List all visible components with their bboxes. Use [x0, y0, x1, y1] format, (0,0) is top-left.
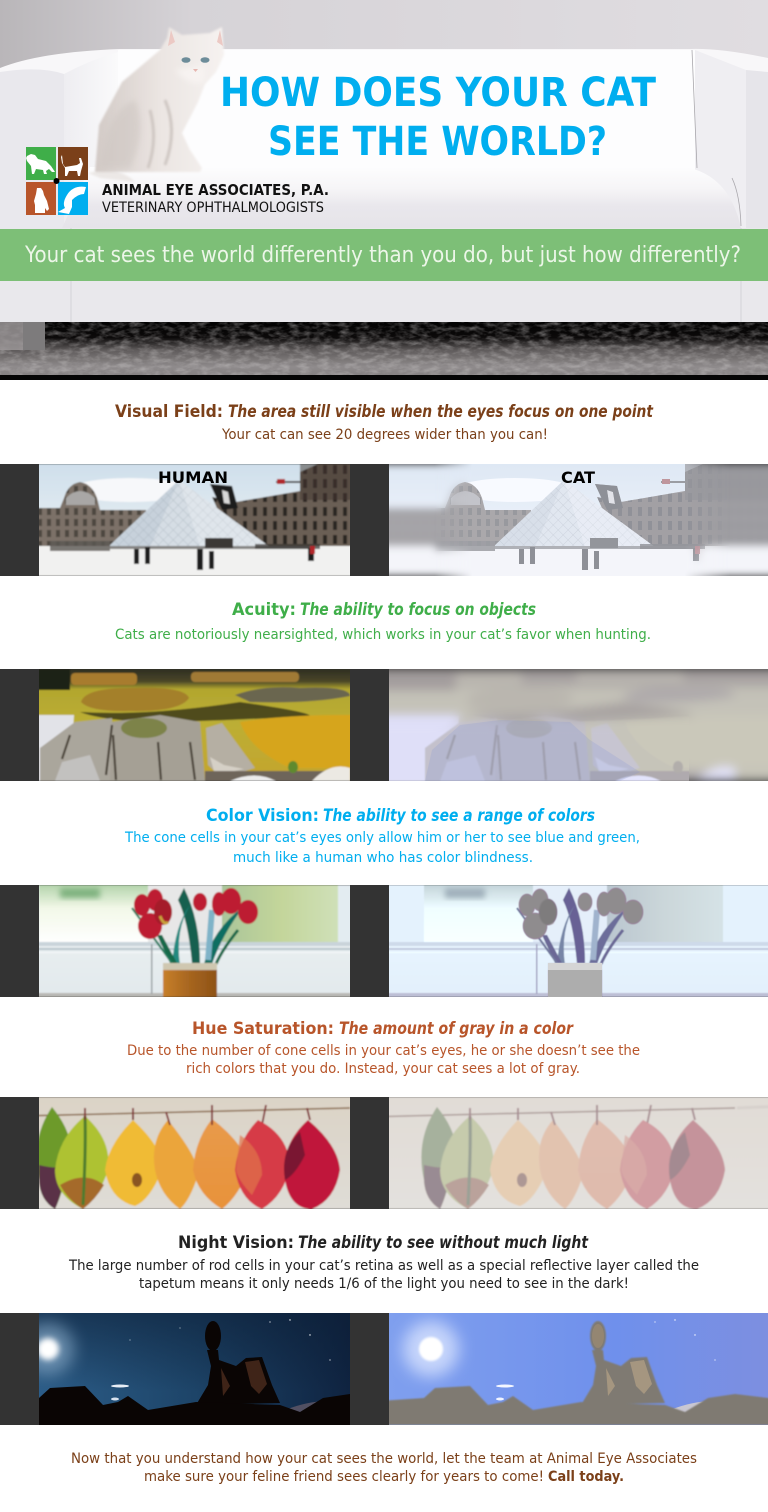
section: visual field heading [115, 402, 654, 443]
hero bottom rule [0, 375, 768, 380]
section: visual field heading: The area still visible when the eyes focus on one point [228, 402, 654, 422]
section: acuity heading: Cats are notoriously nearsighted, which works in your cat’s favor when hunting. [115, 627, 651, 643]
photo: cat view [365, 669, 768, 781]
section: hue saturation heading: Hue Saturation: [192, 1019, 334, 1039]
title [220, 70, 657, 165]
title: SEE THE WORLD? [268, 119, 607, 165]
section: night vision heading: Night Vision: [178, 1233, 294, 1253]
section: color vision heading: Color Vision: [206, 806, 319, 826]
icon: penguin [34, 188, 49, 213]
comparison: acuity photos [0, 669, 768, 781]
section: night vision heading: The ability to see without much light [298, 1233, 589, 1253]
photo: human view [39, 669, 350, 781]
closing call to action: Now that you understand how your cat sees the world, let the team at Animal Eye Associates [71, 1451, 697, 1467]
section: visual field heading: Visual Field: [115, 402, 223, 422]
closing call to action [71, 1451, 697, 1485]
section: night vision heading: tapetum means it only needs 1/6 of the light you need to see in the dark! [139, 1276, 629, 1292]
rug and shadow [0, 320, 768, 375]
section: night vision heading: The large number of rod cells in your cat’s retina as well as a special reflective layer called the [68, 1258, 699, 1274]
icon: dolphin [58, 187, 86, 214]
hero: cat on white sofa [0, 0, 768, 375]
section: acuity heading: Acuity: [232, 600, 296, 620]
section: visual field heading: Your cat can see 20 degrees wider than you can! [221, 427, 548, 443]
label: cat: CAT [561, 468, 595, 487]
label: human: HUMAN [158, 468, 228, 487]
photo: human view [39, 1313, 350, 1425]
section: color vision heading: The cone cells in your cat’s eyes only allow him or her to see blue and green, [124, 830, 640, 846]
company name: ANIMAL EYE ASSOCIATES, P.A. [102, 181, 329, 199]
section: color vision heading: much like a human who has color blindness. [233, 850, 533, 866]
icon: dog [26, 154, 55, 174]
closing call to action: Call today. [548, 1469, 624, 1485]
company name: VETERINARY OPHTHALMOLOGISTS [102, 200, 324, 216]
photo: cat view [365, 464, 768, 576]
comparison: night vision photos [0, 1313, 768, 1425]
logo: four animal tiles [26, 147, 88, 215]
section: color vision heading: The ability to see a range of colors [323, 806, 595, 826]
icon: small cat [61, 155, 83, 176]
comparison: visual field photos [0, 464, 768, 576]
title: HOW DOES YOUR CAT [220, 70, 657, 116]
closing call to action: make sure your feline friend sees clearly for years to come! [144, 1469, 544, 1485]
photo: human view [39, 464, 350, 576]
section: hue saturation heading: The amount of gray in a color [339, 1019, 574, 1039]
section: hue saturation heading: Due to the number of cone cells in your cat’s eyes, he or she doesn’t see the [127, 1043, 640, 1059]
section: hue saturation heading [127, 1019, 640, 1077]
photo: cat view [365, 1313, 768, 1425]
logo centre dot [54, 178, 60, 184]
intro banner [0, 229, 768, 281]
section: night vision heading [68, 1233, 699, 1292]
section: acuity heading: The ability to focus on objects [300, 600, 536, 620]
photo: human view [39, 885, 350, 997]
photo: cat view [365, 885, 768, 997]
section: hue saturation heading: rich colors that you do. Instead, your cat sees a lot of gray. [186, 1061, 580, 1077]
icon: white cat [88, 27, 224, 182]
photo: cat view [365, 1097, 768, 1209]
section: color vision heading [124, 806, 640, 866]
comparison: hue saturation photos [0, 1097, 768, 1209]
company name [102, 181, 329, 216]
section: acuity heading [115, 600, 651, 643]
sofa body [0, 49, 768, 322]
photo: human view [39, 1097, 350, 1209]
comparison: color vision photos [0, 885, 768, 997]
